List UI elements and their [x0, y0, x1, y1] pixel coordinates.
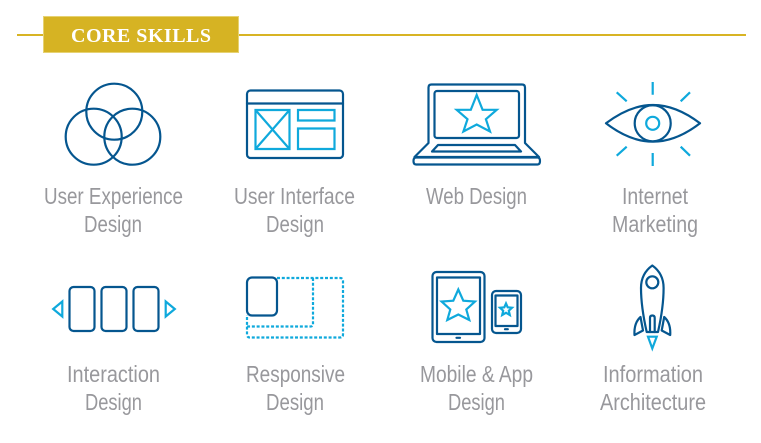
label: Information Architecture — [600, 361, 706, 415]
label: Information Architecture: Architecture — [600, 389, 706, 415]
skill: Responsive Design — [246, 278, 345, 415]
skill: Information Architecture — [600, 266, 706, 415]
icon: laptop with star — [414, 84, 540, 164]
skill: User Interface Design — [234, 90, 355, 237]
label: User Experience Design — [44, 183, 183, 237]
label: User Interface Design: User Interface — [234, 183, 355, 209]
skill: Interaction Design — [53, 287, 175, 415]
icon: nested responsive frames — [247, 278, 343, 338]
skill: Mobile & App Design — [420, 272, 533, 415]
skill: User Experience Design — [44, 84, 183, 237]
label: Interaction Design: Design — [85, 389, 142, 415]
label: Interaction Design: Interaction — [67, 361, 160, 387]
icon: carousel cards with arrows — [53, 287, 175, 331]
label: User Experience Design: Design — [84, 211, 142, 237]
skill: Web Design — [414, 84, 540, 209]
skill: Internet Marketing — [606, 82, 700, 237]
label: Internet Marketing: Marketing — [612, 211, 698, 237]
icon: rocket — [634, 266, 670, 348]
label: User Interface Design: Design — [266, 211, 324, 237]
label: Information Architecture: Information — [603, 361, 703, 387]
title banner: CORE SKILLS — [71, 25, 211, 47]
label: Mobile & App Design: Mobile & App — [420, 361, 533, 387]
label: Responsive Design: Design — [266, 389, 324, 415]
title banner — [44, 16, 238, 52]
label: Responsive Design — [246, 361, 345, 415]
label: User Interface Design — [234, 183, 355, 237]
label: Web Design: Web Design — [426, 183, 527, 209]
icon: three overlapping circles — [66, 84, 160, 165]
icon: tablet and phone — [432, 272, 521, 342]
icon: eye with rays — [606, 82, 700, 166]
label: User Experience Design: User Experience — [44, 183, 183, 209]
icon: wireframe window — [247, 90, 343, 158]
label: Internet Marketing: Internet — [622, 183, 689, 209]
label: Responsive Design: Responsive — [246, 361, 345, 387]
header rule — [17, 34, 746, 36]
label: Internet Marketing — [612, 183, 698, 237]
label: Mobile & App Design — [420, 361, 533, 415]
label: Interaction Design — [67, 361, 160, 415]
label: Mobile & App Design: Design — [448, 389, 505, 415]
